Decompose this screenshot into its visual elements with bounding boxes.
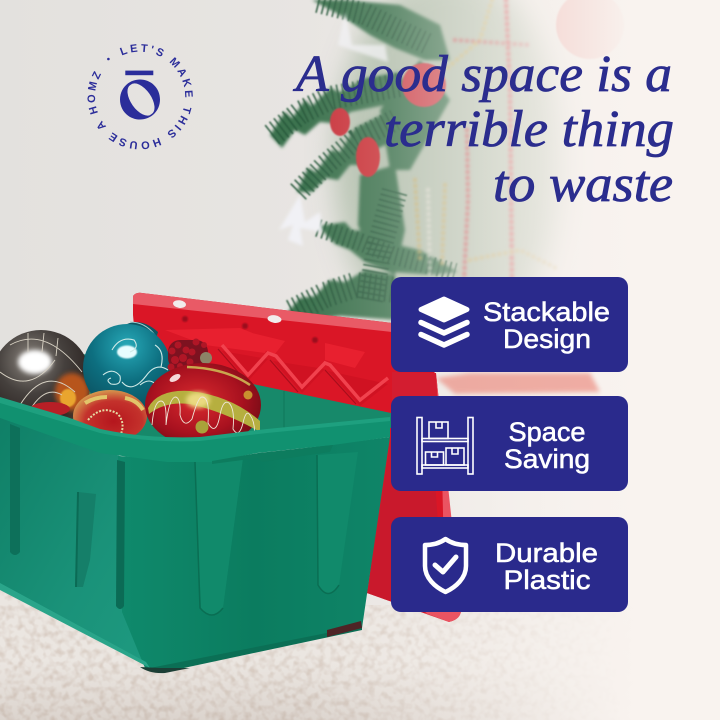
lid holes <box>173 299 186 309</box>
label: stackable design <box>483 297 610 354</box>
bin interior <box>0 350 391 442</box>
ornament: berries <box>168 338 212 370</box>
label: stackable design: Stackable <box>483 297 610 327</box>
bin interior wall seam <box>283 391 285 430</box>
headline: terrible thing <box>384 101 674 158</box>
tree branches <box>270 0 458 320</box>
ornament: silver and bronze <box>0 330 91 430</box>
tree skirt <box>436 373 600 394</box>
background: right-side fade <box>300 0 720 720</box>
ornament: small red and gold <box>73 390 147 442</box>
ornaments <box>0 322 261 447</box>
lid right flank <box>367 430 445 620</box>
bin base edge <box>0 583 150 668</box>
icon: shield with check <box>425 539 466 592</box>
label: space saving: Space <box>508 417 586 447</box>
headline: A good space is a <box>293 46 672 103</box>
label: durable plastic: Durable <box>495 538 598 568</box>
background: christmas tree <box>270 0 624 350</box>
headline <box>293 46 674 213</box>
tree garlands <box>415 0 560 280</box>
icon: warehouse shelf <box>417 418 473 474</box>
bin front ribs <box>195 452 358 615</box>
label: space saving: Saving <box>504 444 590 474</box>
panel: stackable design <box>391 277 628 372</box>
ornament: large red with gold band <box>145 363 261 447</box>
tree baubles <box>330 0 624 177</box>
icon: stacked layers <box>421 299 467 345</box>
label: stackable design: Design <box>503 324 591 354</box>
background: carpet <box>0 585 720 720</box>
logo ring text: LET'S MAKE THIS HOUSE A HOMZ <box>87 44 193 150</box>
storage bin lid <box>133 293 461 622</box>
tree bows <box>279 12 388 246</box>
storage bin body <box>0 397 390 673</box>
panel: durable plastic <box>391 517 628 612</box>
panel: space saving <box>391 396 628 491</box>
headline: to waste <box>493 156 673 213</box>
bin front face <box>118 437 390 671</box>
logo badge <box>87 44 193 150</box>
bin handle <box>212 445 333 464</box>
logo dot <box>107 58 110 60</box>
label: durable plastic <box>495 538 598 595</box>
bin left face <box>0 412 150 668</box>
ornament: teal <box>83 322 171 412</box>
lid emboss <box>165 316 388 406</box>
lid shell <box>133 293 461 622</box>
tree needles <box>272 2 455 312</box>
label: durable plastic: Plastic <box>504 565 590 595</box>
bin rim <box>0 398 390 462</box>
lid lip <box>133 293 392 332</box>
bin left ribs <box>10 424 125 609</box>
logo mark <box>120 71 160 120</box>
label: space saving <box>504 417 590 474</box>
